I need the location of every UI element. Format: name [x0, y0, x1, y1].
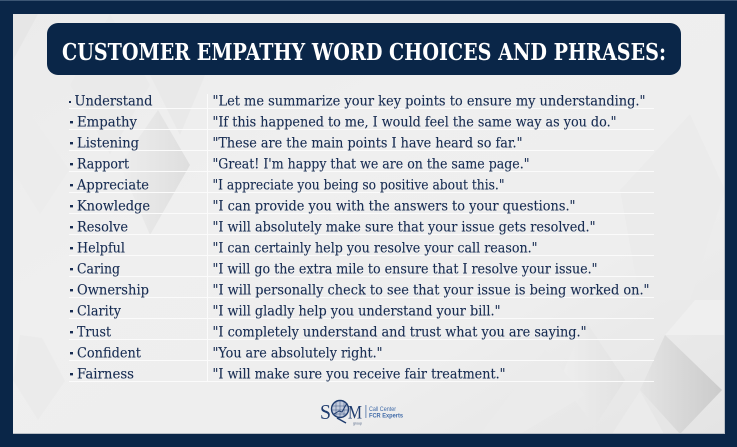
word list: Caring — [77, 262, 120, 278]
word list: Listening — [77, 136, 139, 152]
title bar — [47, 23, 681, 75]
phrase list: "I will absolutely make sure that your issue gets resolved." — [212, 220, 596, 236]
bullet markers — [69, 101, 73, 375]
phrase list: "I completely understand and trust what you are saying." — [212, 324, 586, 340]
phrase list: "I can certainly help you resolve your call reason." — [212, 240, 538, 256]
word list: Clarity — [77, 304, 121, 320]
phrase list: "I will personally check to see that your issue is being worked on." — [212, 282, 650, 298]
logo sub-mark: group — [353, 422, 362, 426]
table rules — [69, 94, 654, 382]
logo divider — [364, 405, 367, 418]
word list: Understand — [74, 94, 152, 110]
logo tagline: FCR Experts — [369, 412, 403, 420]
word list: Fairness — [77, 366, 134, 382]
phrase list: "I will go the extra mile to ensure that I resolve your issue." — [212, 262, 598, 278]
phrase list: "You are absolutely right." — [212, 346, 382, 362]
phrase list: "I appreciate you being so positive about this." — [212, 178, 504, 194]
logo tagline — [369, 406, 403, 420]
logo: SQM: M — [348, 402, 362, 424]
phrase list: "I will gladly help you understand your bill." — [212, 304, 500, 320]
word list: Trust — [77, 324, 111, 340]
phrase list: "These are the main points I have heard so far." — [212, 136, 522, 152]
phrase list: "Let me summarize your key points to ensure my understanding." — [212, 94, 646, 110]
word list: Knowledge — [77, 198, 150, 214]
logo wordmark: S — [320, 400, 331, 424]
word list: Helpful — [77, 240, 125, 256]
logo tagline: Call Center — [369, 406, 397, 413]
phrase list: "If this happened to me, I would feel the same way as you do." — [212, 114, 616, 130]
word list: Confident — [77, 346, 141, 362]
icon: globe in Q — [332, 400, 348, 423]
word list: Rapport — [77, 156, 129, 172]
phrase list: "I will make sure you receive fair treatment." — [212, 366, 506, 382]
word list: Resolve — [77, 220, 128, 236]
phrase list: "Great! I'm happy that we are on the same page." — [212, 156, 530, 172]
logo: SQM — [320, 400, 403, 426]
phrase list: "I can provide you with the answers to your questions." — [212, 198, 576, 214]
word list: Appreciate — [76, 178, 149, 194]
phrase list — [212, 94, 650, 382]
word list: Ownership — [77, 282, 149, 298]
word list — [74, 94, 152, 382]
word list: Empathy — [77, 114, 137, 130]
